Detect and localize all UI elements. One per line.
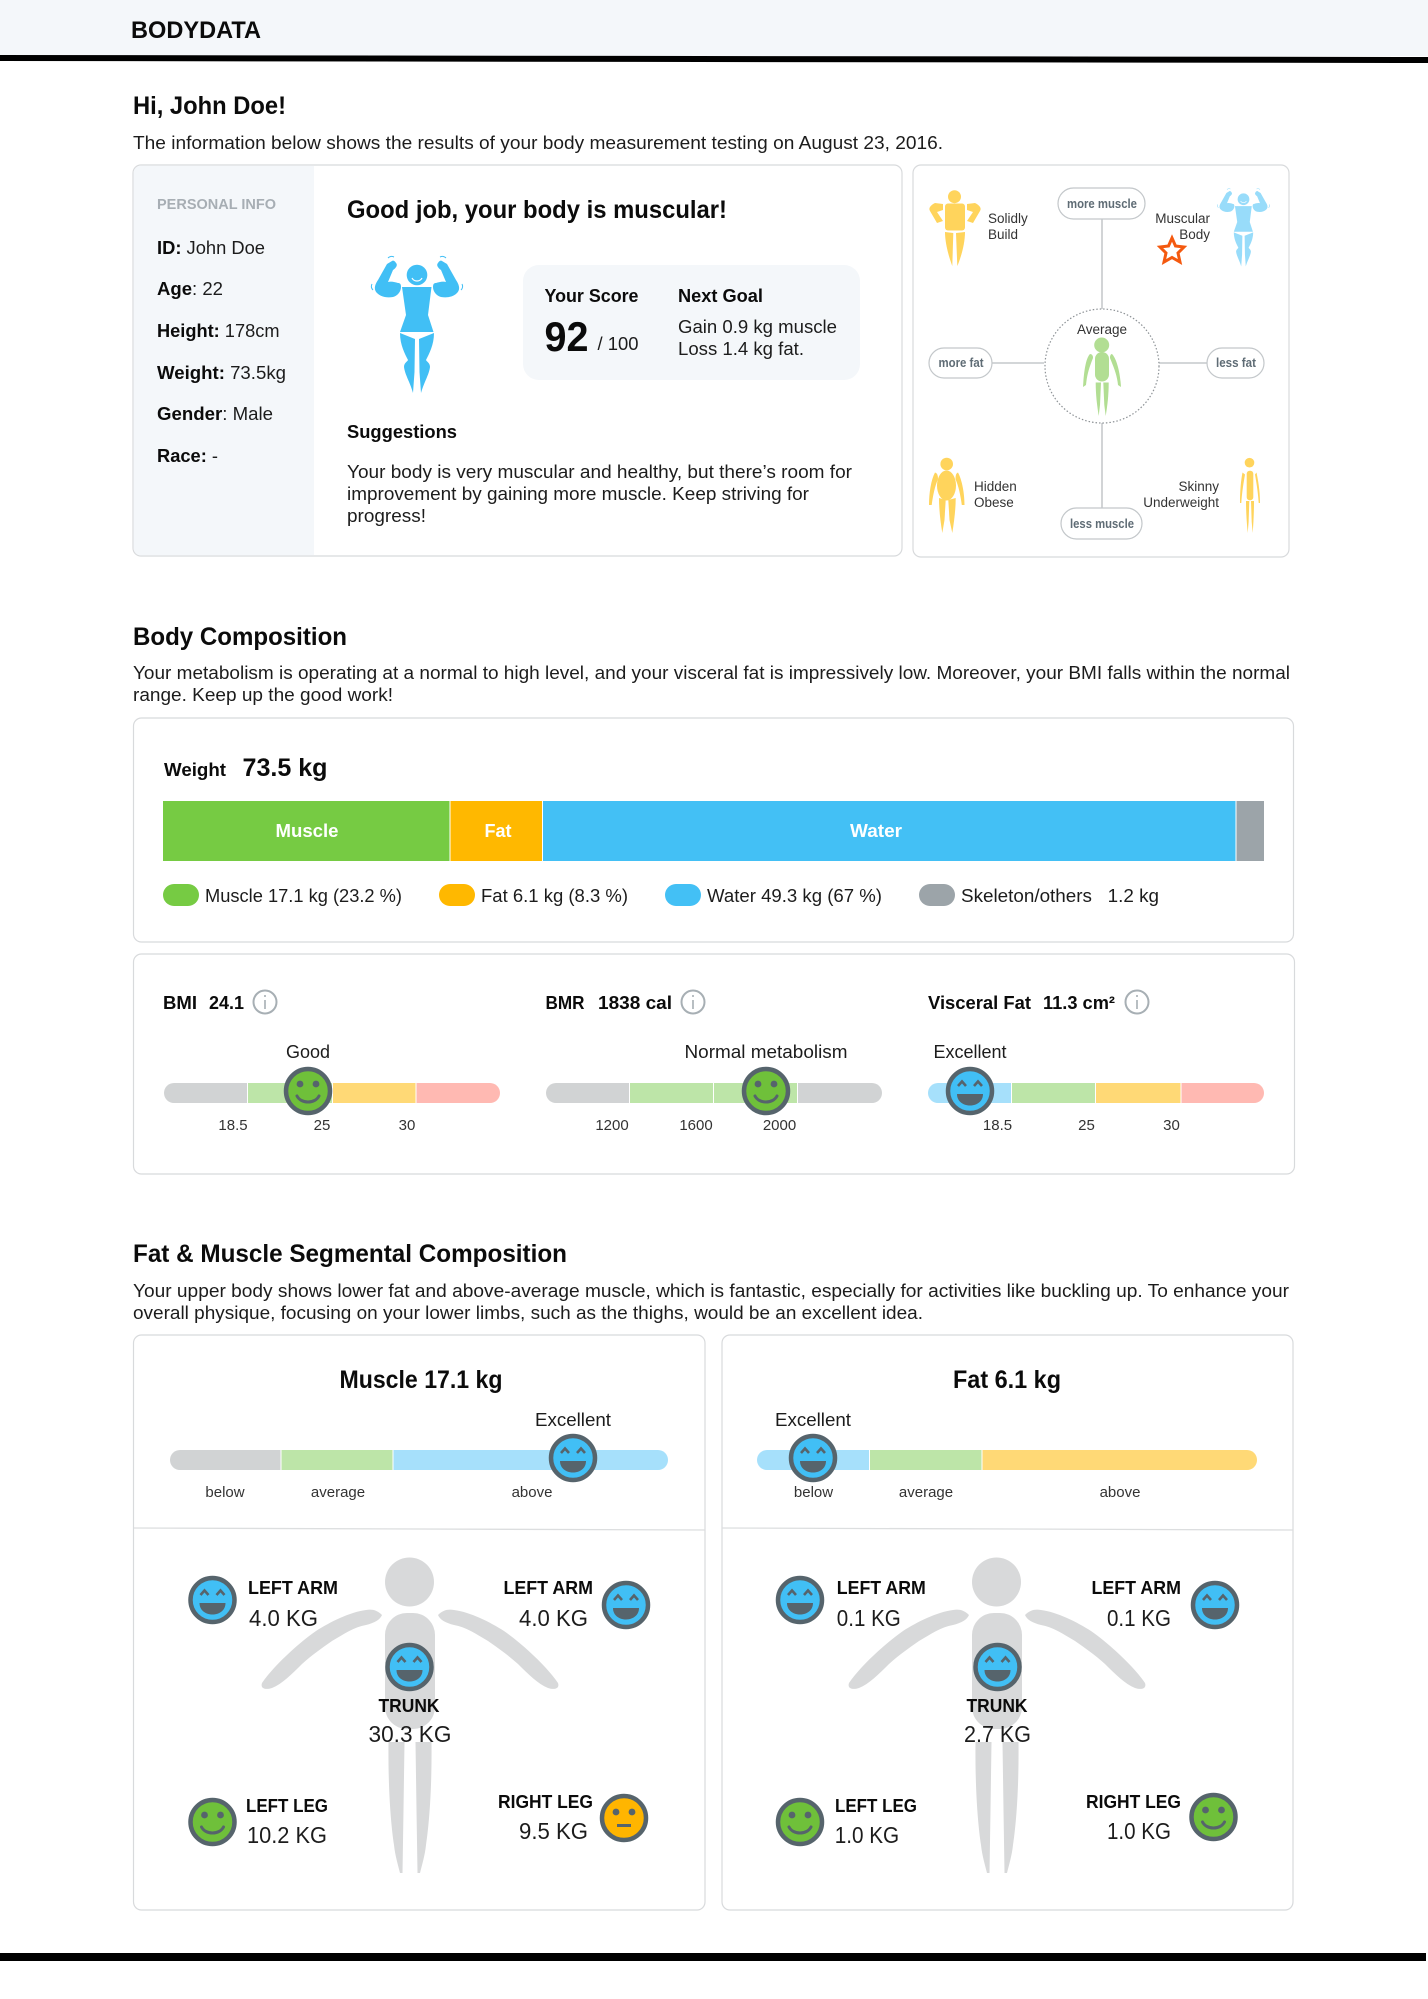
fat title: Fat 6.1 kg [953,1366,1061,1394]
axis pill: more fat: more fat [938,356,984,370]
personal info sidebar: Height: 178cm [157,321,280,341]
axis pill: more muscle [1058,188,1145,219]
stacked composition bar: Fat [484,821,512,841]
gauge bar: BMR [546,1083,882,1103]
suggestions: improvement by gaining more muscle. Keep striving for [347,484,809,504]
greeting heading: Hi, John Doe! [133,92,286,120]
legend: Water 49.3 kg (67 %) [707,886,882,906]
indicator: BMI: Good [286,1042,330,1062]
segment: trunk: 30.3 KG [368,1721,452,1747]
fat rating label: Excellent [775,1410,851,1430]
segment: trunk [368,1645,452,1747]
body composition description: Your metabolism is operating at a normal to high level, and your visceral fat is impressively low. Moreover, your BMI falls within the normal [133,663,1290,683]
indicator: BMR: 1600 [679,1117,713,1134]
indicator: visceral fat: 18.5 [983,1117,1012,1134]
center circle: average [1045,309,1159,423]
legend: Muscle 17.1 kg (23.2 %) [205,886,402,906]
weight value [164,754,328,782]
indicator: BMI: 24.1 [209,993,244,1013]
heading: segmental composition: Fat & Muscle Segmental Composition [133,1240,567,1268]
greeting intro text: The information below shows the results of your body measurement testing on August 23, 2016. [133,133,943,153]
muscle gauge: above [512,1484,552,1501]
indicator: visceral fat: Visceral Fat [928,993,1031,1013]
segment: trunk [964,1645,1031,1747]
segment: right leg [1086,1792,1236,1844]
personal info sidebar: Age: 22 [157,279,223,299]
segment: left arm [778,1578,926,1631]
fat gauge: above [1100,1484,1140,1501]
panel: muscle segments [134,1335,705,1910]
segment: left leg [190,1796,328,1848]
axis pill: less muscle: less muscle [1070,517,1134,531]
icon: info [254,990,276,1014]
indicator: BMI [163,990,500,1134]
indicator: BMI: BMI [163,993,197,1013]
axis pill: more muscle: more muscle [1067,197,1137,211]
legend [163,884,1159,906]
icon: info [682,990,704,1014]
segment: left leg [778,1796,917,1848]
suggestions: progress! [347,506,426,526]
body composition description: range. Keep up the good work! [133,685,393,705]
personal info sidebar: Weight: 73.5kg [157,363,286,383]
indicator: visceral fat [928,990,1264,1134]
score card: Loss 1.4 kg fat. [678,339,804,359]
segment: right leg: RIGHT LEG [498,1792,593,1812]
personal info sidebar: ID: John Doe [157,238,265,258]
segment: right arm: LEFT ARM [1092,1578,1181,1598]
segment: left arm: LEFT ARM [248,1578,338,1598]
score card: Next Goal [678,286,763,306]
suggestions: Suggestions [347,422,457,442]
body type: muscular body with star: Muscular [1155,211,1211,226]
indicator: BMR: 1200 [595,1117,629,1134]
segment: right arm [504,1578,648,1631]
stacked composition bar [163,801,1264,861]
axis pill: less fat: less fat [1216,356,1257,370]
segment: right leg: 1.0 KG [1107,1818,1171,1844]
panel: weight composition [134,718,1294,942]
page header [0,0,1428,63]
indicator: BMR [546,990,882,1134]
segment: right arm: 4.0 KG [519,1605,588,1631]
suggestions [347,422,852,526]
brand title: BODYDATA [131,17,261,44]
segment: trunk: 2.7 KG [964,1721,1031,1747]
score card: Gain 0.9 kg muscle [678,317,837,337]
score card: / 100 [598,334,638,354]
personal info sidebar: Race: - [157,446,218,466]
body type: hidden obese: Hidden [974,479,1017,494]
muscle gauge [170,1450,668,1501]
segment: left arm [190,1578,338,1631]
axis pill: less muscle [1061,508,1142,539]
panel: metabolic indicators [134,954,1294,1174]
gauge bar: visceral fat [928,1083,1264,1103]
fat gauge: below [794,1484,833,1501]
body type: skinny underweight: Skinny [1178,479,1219,494]
indicator: BMR: 1838 cal [598,993,672,1013]
indicator: BMR: Normal metabolism [684,1042,848,1062]
segment: left arm: 4.0 KG [249,1605,318,1631]
icon: info [1126,990,1148,1014]
body type: solidly build [929,190,1028,266]
segment: left leg: LEFT LEG [246,1796,328,1816]
body composition description [133,663,1290,705]
body type: skinny underweight [1143,458,1260,533]
icon: muscular body [371,256,463,393]
body type: hidden obese: Obese [974,495,1014,510]
fat gauge: average [899,1484,953,1501]
segmental description [133,1281,1289,1323]
segment: left leg: 1.0 KG [835,1822,899,1848]
score card: 92 [544,313,588,360]
indicator: visceral fat: 30 [1163,1117,1180,1134]
axis pill: more fat [929,348,992,378]
panel: body type quadrant [913,165,1289,557]
body type: muscular body with star: Body [1179,227,1210,242]
segment: right arm [1092,1578,1237,1631]
legend: Skeleton/others 1.2 kg [961,886,1159,906]
stacked composition bar: Muscle [276,821,338,841]
segment: right leg: 9.5 KG [519,1818,588,1844]
segmental description: Your upper body shows lower fat and above-average muscle, which is fantastic, especially for activities like buckling up. To enhance your [133,1281,1289,1301]
stacked composition bar: Water [850,821,902,841]
icon: star marker [1160,238,1184,262]
center circle: average: Average [1077,322,1127,337]
personal info sidebar: Gender: Male [157,404,273,424]
indicator: visceral fat: 11.3 cm² [1043,993,1115,1013]
body type: solidly build: Solidly [988,211,1028,226]
axis pill: less fat [1207,348,1264,378]
fat gauge [757,1450,1257,1501]
body figure [849,1558,1145,1873]
personal info sidebar: PERSONAL INFO [157,197,276,213]
weight value: Weight [164,760,226,780]
segment: trunk: TRUNK [378,1696,440,1716]
muscle rating label: Excellent [535,1410,611,1430]
heading: body composition: Body Composition [133,623,347,651]
indicator: visceral fat: Excellent [933,1042,1007,1062]
indicator: BMI: 18.5 [218,1117,248,1134]
indicator: BMR: BMR [546,993,584,1013]
indicator: BMI: 25 [314,1117,330,1134]
segment: left leg: 10.2 KG [247,1822,327,1848]
segmental description: overall physique, focusing on your lower limbs, such as the thighs, would be an excellent idea. [133,1303,923,1323]
body type: muscular body with star [1155,189,1270,267]
suggestions: Your body is very muscular and healthy, but there’s room for [347,462,852,482]
indicator: visceral fat: 25 [1078,1117,1095,1134]
legend: Fat 6.1 kg (8.3 %) [481,886,628,906]
body type: skinny underweight: Underweight [1143,495,1219,510]
score card: Your Score [544,286,638,306]
indicator: BMI: 30 [399,1117,415,1134]
weight value: 73.5 kg [242,754,328,782]
segment: right leg [498,1792,646,1844]
body figure [262,1558,558,1873]
segment: left arm: LEFT ARM [837,1578,926,1598]
segment: right arm: 0.1 KG [1107,1605,1171,1631]
segment: right arm: LEFT ARM [504,1578,593,1598]
personal info sidebar [134,166,314,555]
panel: fat segments [722,1335,1293,1910]
score card [523,265,860,380]
body type: hidden obese [929,458,1017,533]
result headline: Good job, your body is muscular! [347,196,727,224]
muscle title: Muscle 17.1 kg [340,1366,502,1394]
segment: left leg: LEFT LEG [835,1796,917,1816]
muscle gauge: average [311,1484,365,1501]
gauge bar: BMI [164,1083,500,1103]
segment: left arm: 0.1 KG [837,1605,901,1631]
muscle gauge: below [205,1484,245,1501]
panel: result summary [133,165,902,556]
segment: right leg: RIGHT LEG [1086,1792,1181,1812]
indicator: BMR: 2000 [763,1117,796,1134]
body type: solidly build: Build [988,227,1018,242]
segment: trunk: TRUNK [966,1696,1028,1716]
footer rule [0,1953,1426,1961]
